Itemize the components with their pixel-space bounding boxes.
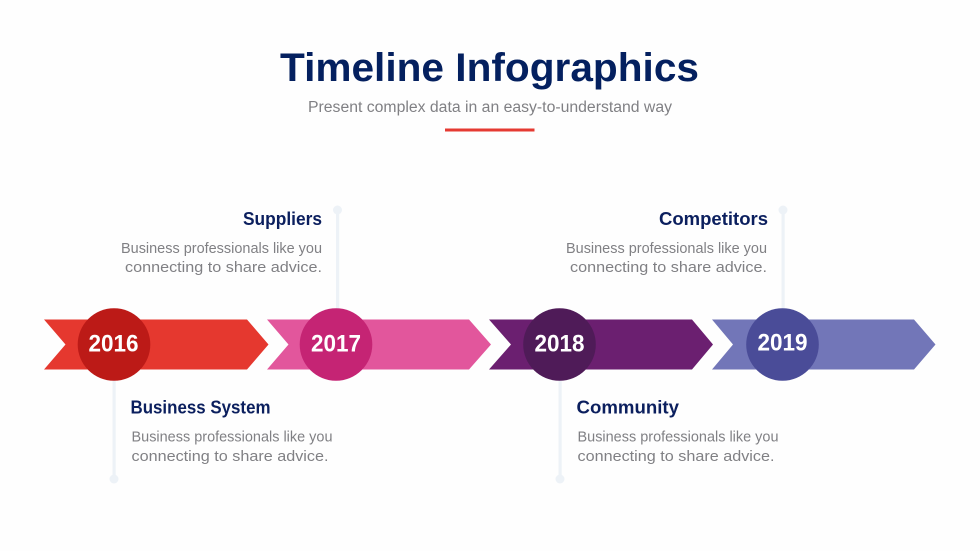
- text block: Competitors: Competitors: [659, 208, 768, 229]
- subtitle: Present complex data in an easy-to-understand way: [308, 99, 672, 116]
- text block: Community: Community: [576, 396, 680, 418]
- connector: 2017: [333, 206, 342, 320]
- text block: Competitors: connecting to share advice.: [570, 259, 767, 276]
- arrow: 2016: [44, 320, 268, 370]
- text block: Community: Business professionals like you: [578, 428, 778, 446]
- year badge: 2017: 2017: [311, 330, 361, 358]
- arrow: 2018: [489, 320, 713, 370]
- text block: Community: [576, 396, 778, 465]
- year badge: 2019: [746, 308, 819, 381]
- text block: Business System: Business professionals like you: [132, 428, 332, 446]
- text block: Competitors: [566, 208, 768, 276]
- year badge: 2017: [300, 308, 372, 381]
- connector: 2016: [110, 370, 118, 484]
- arrow: 2017: [267, 320, 491, 370]
- year badge: 2016: [78, 308, 150, 381]
- text block: Suppliers: connecting to share advice.: [125, 259, 322, 276]
- title: Timeline Infographics: [280, 46, 699, 90]
- text block: Suppliers: Business professionals like you: [121, 240, 322, 257]
- text block: Community: connecting to share advice.: [578, 448, 774, 465]
- text block: Business System: connecting to share advice.: [132, 448, 328, 465]
- text block: Business System: Business System: [130, 396, 270, 418]
- connector: 2019: [778, 206, 788, 320]
- text block: Business System: [130, 396, 332, 465]
- text block: Suppliers: Suppliers: [243, 208, 322, 229]
- year badge: 2019: 2019: [758, 330, 808, 356]
- title underline: [445, 128, 534, 132]
- year badge: 2018: 2018: [534, 330, 584, 358]
- year badge: 2018: [523, 308, 596, 381]
- year badge: 2016: 2016: [88, 330, 138, 358]
- text block: Suppliers: [121, 208, 322, 276]
- arrow: 2019: [712, 320, 936, 370]
- connector: 2018: [556, 370, 564, 484]
- text block: Competitors: Business professionals like you: [566, 240, 767, 257]
